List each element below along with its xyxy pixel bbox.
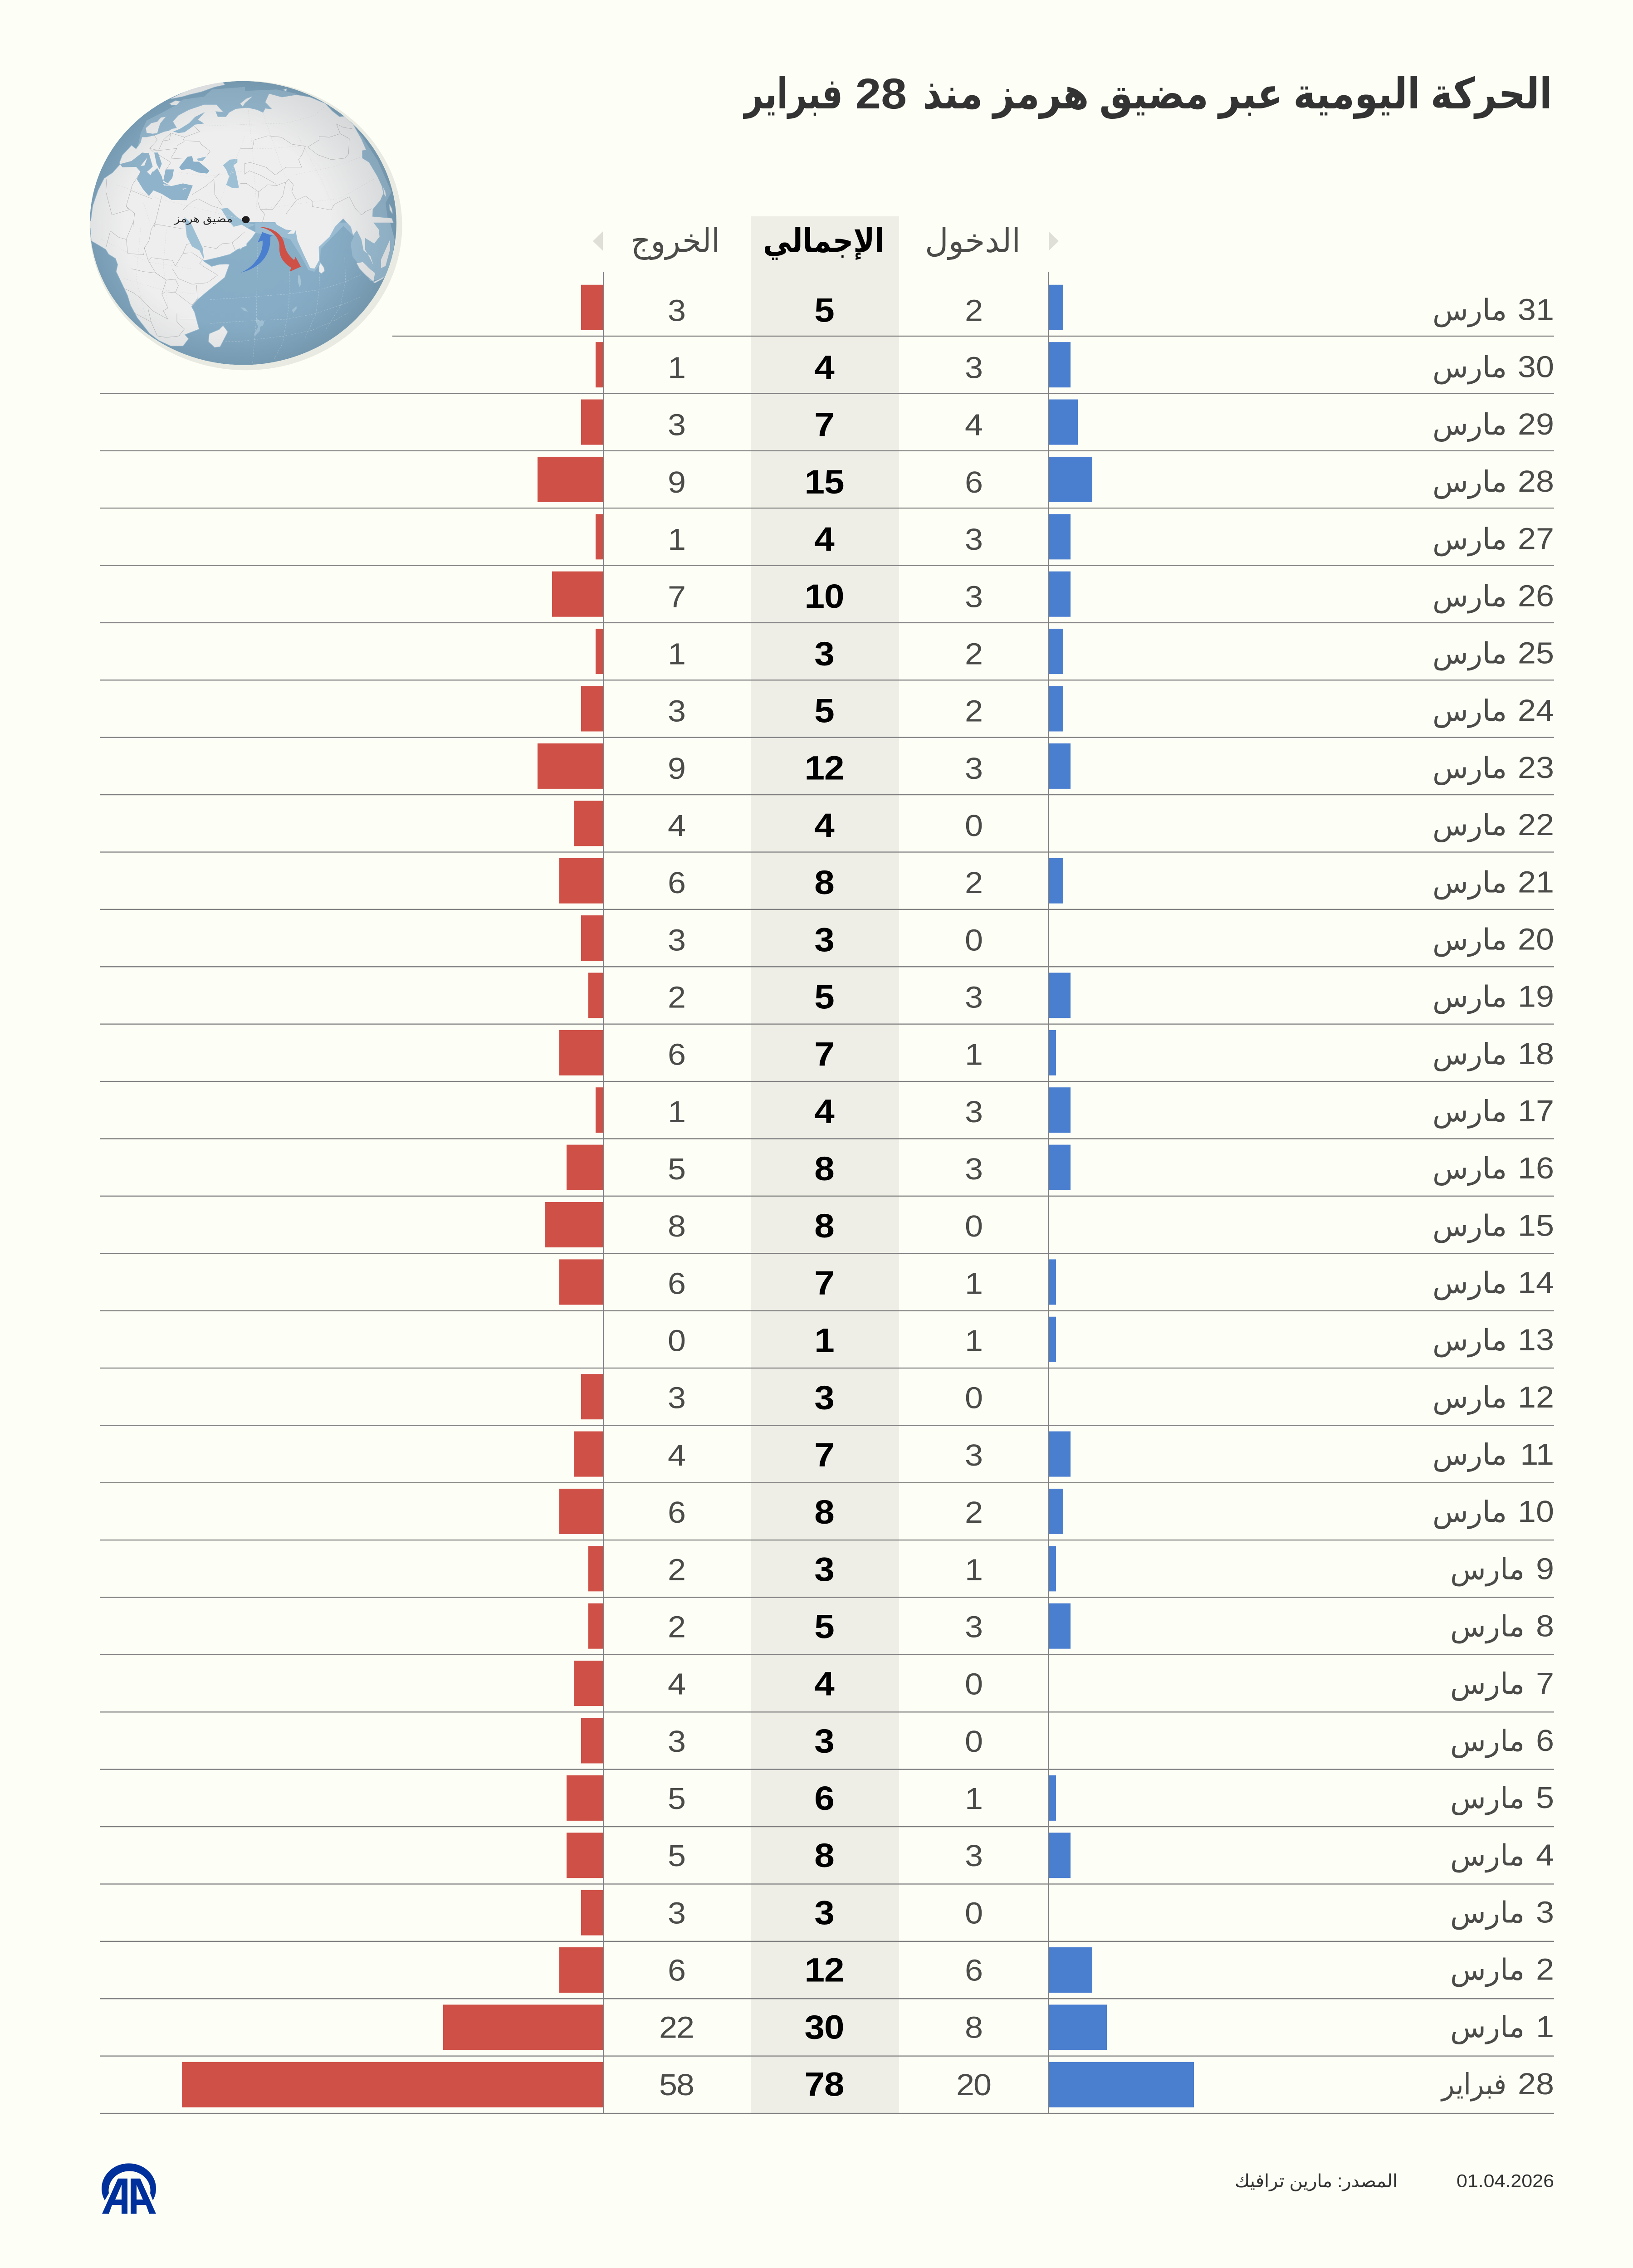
row: 18 March <box>559 1030 1554 1075</box>
date label: 15 <box>1518 1208 1554 1242</box>
date label <box>1433 293 1554 327</box>
date label: 18 <box>1518 1036 1554 1070</box>
inbound bar <box>1049 2062 1194 2107</box>
inbound value: 0 <box>965 808 982 842</box>
outbound value: 2 <box>668 980 685 1014</box>
date label: مارس <box>1433 1267 1507 1300</box>
date label: مارس <box>1450 1839 1525 1872</box>
outbound bar <box>574 1432 603 1477</box>
outbound bar <box>567 1145 603 1190</box>
inbound value: 1 <box>965 1266 982 1300</box>
date label: مارس <box>1433 1496 1507 1529</box>
row: 27 March <box>596 514 1554 559</box>
outbound value: 6 <box>668 1266 685 1300</box>
outbound value: 5 <box>668 1781 685 1815</box>
date label <box>1433 1380 1554 1414</box>
row: 13 March <box>668 1317 1554 1362</box>
outbound value: 7 <box>668 580 685 614</box>
outbound value: 9 <box>668 465 685 499</box>
date label: مارس <box>1433 694 1507 728</box>
inbound value: 1 <box>965 1781 982 1815</box>
outbound bar <box>559 858 603 904</box>
total value: 7 <box>814 1036 834 1073</box>
total column band <box>751 216 899 2113</box>
total value: 3 <box>814 1551 834 1588</box>
inbound value: 3 <box>965 1152 982 1186</box>
outbound value: 3 <box>668 293 685 327</box>
inbound value: 2 <box>965 637 982 671</box>
inbound bar <box>1049 1947 1092 1993</box>
date label: 27 <box>1518 522 1554 556</box>
row: 1 March <box>443 2004 1554 2050</box>
outbound bar <box>559 1489 603 1534</box>
inbound bar <box>1049 514 1071 559</box>
date label: 11 <box>1520 1437 1554 1471</box>
date label <box>1433 1495 1554 1529</box>
total value: 5 <box>814 978 834 1016</box>
inbound value: 0 <box>965 1724 982 1758</box>
inbound value: 2 <box>965 1496 982 1530</box>
outbound bar <box>581 915 603 961</box>
date label: مارس <box>1450 1553 1525 1586</box>
date label <box>1433 1266 1554 1300</box>
date label: مارس <box>1450 1610 1525 1643</box>
date label <box>1433 1036 1554 1071</box>
date label: 25 <box>1518 636 1554 670</box>
row: 20 March <box>581 915 1554 961</box>
outbound value: 6 <box>668 1037 685 1071</box>
inbound value: 3 <box>965 1610 982 1644</box>
date label: 23 <box>1518 750 1554 784</box>
outbound bar <box>588 1603 603 1649</box>
row: 5 March <box>567 1775 1554 1821</box>
date label: 8 <box>1536 1609 1554 1643</box>
row: 15 March <box>545 1202 1554 1247</box>
total value: 4 <box>814 807 835 844</box>
total value: 30 <box>805 2009 844 2046</box>
outbound value: 8 <box>668 1209 685 1243</box>
date label: 28 <box>1518 2067 1554 2101</box>
inbound value: 2 <box>965 866 982 900</box>
date label: 31 <box>1518 293 1554 327</box>
globe locator map <box>90 81 402 370</box>
inbound value: 3 <box>965 751 982 785</box>
inbound value: 4 <box>965 408 982 442</box>
date label: 16 <box>1518 1151 1554 1185</box>
total value: 7 <box>814 406 834 444</box>
date label: 13 <box>1518 1323 1554 1357</box>
inbound bar <box>1049 1259 1056 1305</box>
date label: 1 <box>1536 2009 1554 2043</box>
date label: 20 <box>1518 922 1554 956</box>
date label: مارس <box>1450 1782 1525 1815</box>
date label <box>1433 1323 1554 1357</box>
date label <box>1433 350 1554 384</box>
outbound value: 3 <box>668 694 685 728</box>
inbound bar <box>1049 1087 1071 1133</box>
total value: 3 <box>814 1722 834 1760</box>
outbound value: 4 <box>668 1438 685 1472</box>
outbound value: 0 <box>668 1324 685 1358</box>
date label <box>1433 1094 1554 1128</box>
outbound value: 58 <box>659 2068 694 2102</box>
date label: 4 <box>1536 1838 1554 1872</box>
date label <box>1433 1208 1554 1243</box>
title <box>743 69 1552 119</box>
total value: 8 <box>814 864 834 901</box>
total value: 6 <box>814 1780 834 1817</box>
row: 19 March <box>588 973 1554 1018</box>
inbound value: 1 <box>965 1553 982 1587</box>
column header: total: الإجمالي <box>763 222 885 260</box>
row: 29 March <box>581 400 1554 445</box>
date label: مارس <box>1433 752 1507 785</box>
column header: outbound: الخروج <box>631 222 720 260</box>
date label: 28 <box>1518 464 1554 498</box>
date label <box>1433 1437 1554 1471</box>
outbound bar <box>574 1661 603 1706</box>
outbound value: 3 <box>668 1896 685 1930</box>
outbound bar <box>552 572 603 617</box>
date label <box>1433 522 1554 556</box>
inbound bar <box>1049 629 1063 674</box>
total value: 7 <box>814 1265 834 1302</box>
outbound bar <box>574 801 603 846</box>
total value: 5 <box>814 692 834 730</box>
row: 2 March <box>559 1947 1554 1993</box>
date label: مارس <box>1433 637 1507 670</box>
inbound bar <box>1049 858 1063 904</box>
date label: مارس <box>1433 809 1507 842</box>
outbound bar <box>596 514 603 559</box>
total value: 8 <box>814 1207 834 1245</box>
total value: 8 <box>814 1837 834 1874</box>
icon: blue inbound arrow <box>240 232 273 273</box>
total value: 1 <box>814 1322 834 1359</box>
date label: مارس <box>1433 408 1507 441</box>
outbound bar <box>581 1718 603 1764</box>
row: 9 March <box>588 1546 1554 1591</box>
strait label: مضيق هرمز <box>174 213 233 225</box>
inbound value: 3 <box>965 1839 982 1873</box>
inbound bar <box>1049 2004 1107 2050</box>
date label: 21 <box>1518 865 1554 899</box>
outbound bar <box>567 1833 603 1878</box>
inbound value: 3 <box>965 351 982 385</box>
row: 28 March <box>538 457 1554 502</box>
outbound bar <box>581 285 603 330</box>
total value: 5 <box>814 1608 834 1646</box>
inbound value: 3 <box>965 523 982 557</box>
date stamp: 01.04.2026 <box>1457 2170 1554 2191</box>
date label: مارس <box>1433 1038 1507 1071</box>
inbound value: 1 <box>965 1324 982 1358</box>
outbound bar <box>559 1947 603 1993</box>
row: 25 March <box>596 629 1554 674</box>
total value: 4 <box>814 1665 835 1703</box>
icon: red outbound arrow <box>259 227 301 272</box>
outbound bar <box>596 629 603 674</box>
outbound value: 2 <box>668 1610 685 1644</box>
outbound bar <box>538 743 603 789</box>
date label <box>1433 979 1554 1014</box>
outbound bar <box>567 1775 603 1821</box>
outbound value: 1 <box>668 351 685 385</box>
inbound bar <box>1049 1546 1056 1591</box>
outbound value: 1 <box>668 523 685 557</box>
icon: right header triangle <box>1049 231 1059 251</box>
outbound value: 22 <box>659 2010 694 2044</box>
date label: 26 <box>1518 579 1554 613</box>
inbound bar <box>1049 686 1063 731</box>
inbound value: 3 <box>965 1438 982 1472</box>
outbound bar <box>581 400 603 445</box>
row: 11 March <box>574 1432 1554 1477</box>
total value: 3 <box>814 921 834 959</box>
total value: 8 <box>814 1494 834 1531</box>
inbound value: 0 <box>965 1209 982 1243</box>
outbound value: 3 <box>668 408 685 442</box>
total value: 3 <box>814 1894 834 1932</box>
date label <box>1433 1151 1554 1186</box>
source credit: المصدر: مارين ترافيك <box>1235 2170 1398 2191</box>
date label: 6 <box>1536 1723 1554 1757</box>
date label: 14 <box>1518 1266 1554 1300</box>
date label <box>1433 922 1554 957</box>
row: 8 March <box>588 1603 1554 1649</box>
inbound value: 3 <box>965 580 982 614</box>
outbound value: 3 <box>668 1381 685 1415</box>
row: 16 March <box>567 1145 1554 1190</box>
inbound bar <box>1049 1432 1071 1477</box>
total value: 4 <box>814 521 835 558</box>
date label: 22 <box>1518 808 1554 842</box>
row: 4 March <box>567 1833 1554 1878</box>
outbound value: 1 <box>668 1095 685 1129</box>
date label: مارس <box>1450 1897 1525 1930</box>
date label: مارس <box>1450 2011 1525 2044</box>
outbound value: 4 <box>668 1667 685 1701</box>
outbound value: 3 <box>668 1724 685 1758</box>
date label: مارس <box>1433 924 1507 957</box>
inbound value: 20 <box>956 2068 991 2102</box>
inbound bar <box>1049 342 1071 387</box>
total value: 5 <box>814 292 834 329</box>
date label: مارس <box>1433 1324 1507 1357</box>
outbound bar <box>581 1374 603 1419</box>
inbound value: 0 <box>965 1667 982 1701</box>
outbound bar <box>581 1890 603 1936</box>
inbound bar <box>1049 1775 1056 1821</box>
outbound value: 6 <box>668 1953 685 1987</box>
outbound value: 6 <box>668 1496 685 1530</box>
date label <box>1433 464 1554 499</box>
date label <box>1433 693 1554 728</box>
inbound value: 3 <box>965 1095 982 1129</box>
inbound value: 1 <box>965 1037 982 1071</box>
inbound value: 3 <box>965 980 982 1014</box>
total value: 10 <box>805 578 844 615</box>
total value: 3 <box>814 1379 834 1417</box>
inbound value: 2 <box>965 293 982 327</box>
row: 23 March <box>538 743 1554 789</box>
row: 28 February <box>182 2062 1554 2107</box>
outbound bar <box>538 457 603 502</box>
inbound value: 6 <box>965 465 982 499</box>
row: 3 March <box>581 1890 1554 1936</box>
outbound bar <box>559 1030 603 1075</box>
date label <box>1440 2067 1554 2102</box>
total value: 8 <box>814 1150 834 1188</box>
date label: مارس <box>1433 1210 1507 1243</box>
row: 17 March <box>596 1087 1554 1133</box>
date label: 30 <box>1518 350 1554 384</box>
date label: 9 <box>1536 1552 1554 1586</box>
row: 30 March <box>596 342 1554 387</box>
date label: 5 <box>1536 1781 1554 1815</box>
total value: 3 <box>814 635 834 673</box>
total value: 78 <box>805 2066 844 2103</box>
column header: inbound: الدخول <box>925 222 1021 260</box>
outbound bar <box>545 1202 603 1247</box>
outbound value: 9 <box>668 751 685 785</box>
total value: 15 <box>805 463 844 501</box>
outbound bar <box>588 1546 603 1591</box>
outbound value: 2 <box>668 1553 685 1587</box>
outbound bar <box>588 973 603 1018</box>
date label: 12 <box>1518 1380 1554 1414</box>
date label: مارس <box>1450 1954 1525 1987</box>
outbound bar <box>596 1087 603 1133</box>
date label <box>1433 865 1554 899</box>
date label: مارس <box>1433 465 1507 499</box>
date label: 2 <box>1536 1952 1554 1986</box>
icon: left header triangle <box>593 231 603 251</box>
date label <box>1433 750 1554 785</box>
date label: مارس <box>1433 1381 1507 1414</box>
title: فبراير <box>743 69 843 119</box>
outbound bar <box>443 2004 603 2050</box>
inbound value: 8 <box>965 2010 982 2044</box>
date label <box>1433 579 1554 613</box>
date label: مارس <box>1450 1667 1525 1701</box>
outbound bar <box>559 1259 603 1305</box>
date label: مارس <box>1433 981 1507 1014</box>
date label: 17 <box>1518 1094 1554 1128</box>
date label <box>1433 636 1554 670</box>
inbound bar <box>1049 457 1092 502</box>
inbound value: 6 <box>965 1953 982 1987</box>
date label: فبراير <box>1440 2068 1506 2102</box>
row: 22 March <box>574 801 1554 846</box>
inbound bar <box>1049 1317 1056 1362</box>
outbound value: 6 <box>668 866 685 900</box>
date label: مارس <box>1433 580 1507 613</box>
inbound value: 0 <box>965 1381 982 1415</box>
inbound bar <box>1049 1603 1071 1649</box>
row: 24 March <box>581 686 1554 731</box>
row: 31 March <box>581 285 1554 330</box>
inbound value: 0 <box>965 1896 982 1930</box>
total value: 4 <box>814 349 835 386</box>
inbound bar <box>1049 973 1071 1018</box>
inbound bar <box>1049 1030 1056 1075</box>
date label: 29 <box>1518 407 1554 441</box>
total value: 12 <box>805 749 844 787</box>
row: 14 March <box>559 1259 1554 1305</box>
inbound bar <box>1049 400 1078 445</box>
inbound bar <box>1049 285 1063 330</box>
inbound value: 2 <box>965 694 982 728</box>
outbound value: 4 <box>668 808 685 842</box>
inbound bar <box>1049 1145 1071 1190</box>
outbound bar <box>581 686 603 731</box>
inbound bar <box>1049 743 1071 789</box>
date label: مارس <box>1433 1438 1507 1471</box>
icon: AA logo <box>102 2163 156 2214</box>
inbound bar <box>1049 1833 1071 1878</box>
total value: 4 <box>814 1093 835 1130</box>
date label: مارس <box>1450 1725 1525 1758</box>
date label: 10 <box>1518 1495 1554 1529</box>
total value: 12 <box>805 1951 844 1989</box>
date label: 3 <box>1536 1895 1554 1929</box>
date label: 19 <box>1518 979 1554 1013</box>
row: 12 March <box>581 1374 1554 1419</box>
outbound bar <box>596 342 603 387</box>
outbound value: 5 <box>668 1839 685 1873</box>
date label: 24 <box>1518 693 1554 727</box>
inbound value: 0 <box>965 923 982 957</box>
date label: 7 <box>1536 1666 1554 1700</box>
outbound value: 5 <box>668 1152 685 1186</box>
date label: مارس <box>1433 523 1507 556</box>
outbound value: 3 <box>668 923 685 957</box>
row: 10 March <box>559 1489 1554 1534</box>
date label: مارس <box>1433 1153 1507 1186</box>
date label: مارس <box>1433 866 1507 899</box>
row: 21 March <box>559 858 1554 904</box>
date label: مارس <box>1433 1095 1507 1128</box>
row: 6 March <box>581 1718 1554 1764</box>
outbound value: 1 <box>668 637 685 671</box>
inbound bar <box>1049 572 1071 617</box>
date label <box>1433 808 1554 842</box>
date label: مارس <box>1433 294 1507 327</box>
total value: 7 <box>814 1436 834 1474</box>
date label <box>1433 407 1554 441</box>
title: 28 <box>856 69 907 117</box>
row: 26 March <box>552 572 1554 617</box>
outbound bar <box>182 2062 603 2107</box>
row: 7 March <box>574 1661 1554 1706</box>
inbound bar <box>1049 1489 1063 1534</box>
strait marker dot <box>242 216 249 223</box>
date label: مارس <box>1433 351 1507 384</box>
